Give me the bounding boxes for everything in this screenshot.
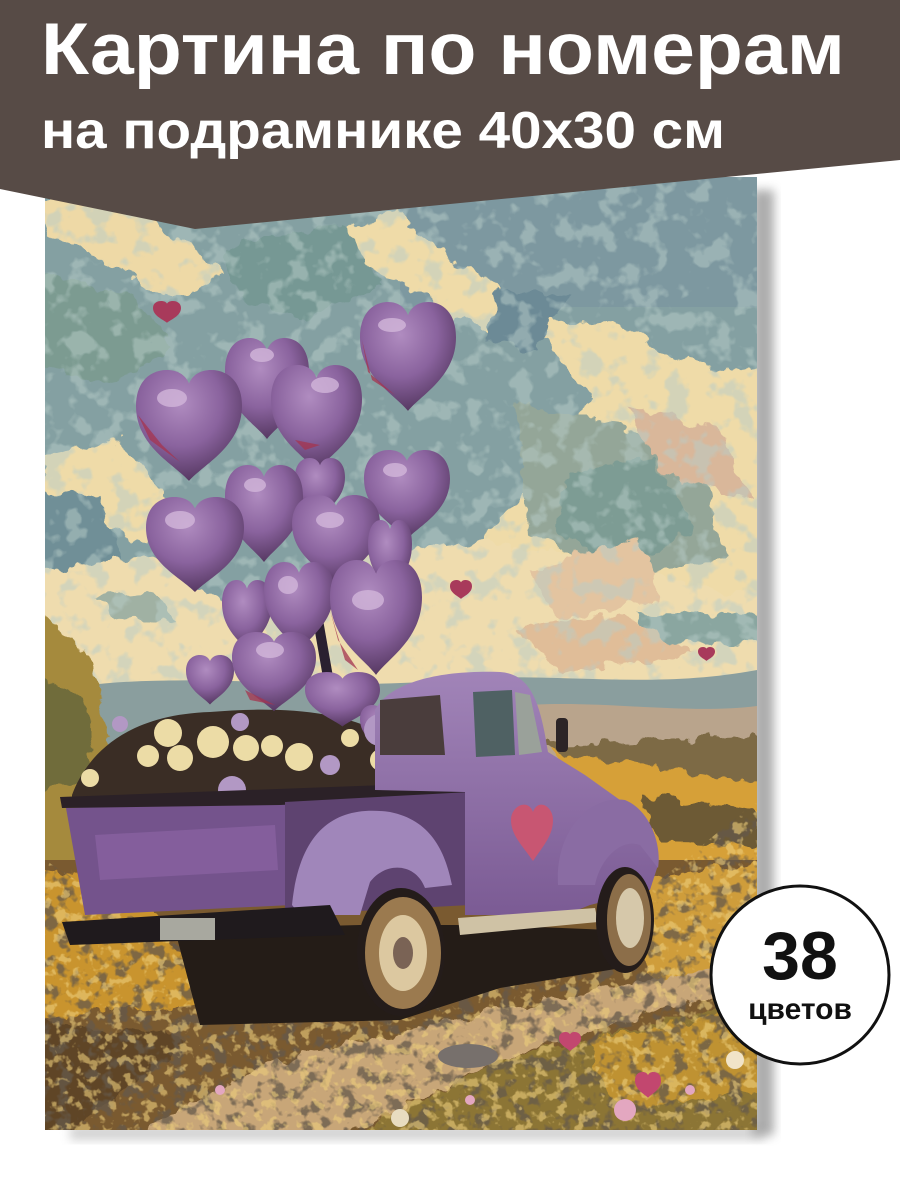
sky — [45, 198, 757, 602]
clouds — [38, 200, 770, 710]
string shadow behind balloons — [315, 623, 332, 672]
balloons — [136, 302, 456, 750]
fields — [45, 615, 757, 860]
side mirror — [556, 718, 568, 752]
front wheel — [596, 867, 654, 973]
specks of flowers — [215, 1051, 744, 1127]
truck bed — [66, 800, 292, 915]
sky mottling — [45, 177, 757, 657]
front fender — [558, 800, 659, 885]
subheading: на подрамнике 40х30 см — [41, 102, 725, 160]
spilled flowers over bed — [218, 715, 375, 792]
rear wheel — [361, 888, 441, 1009]
running board and bumper — [458, 908, 598, 935]
distant hills — [99, 670, 757, 744]
heart on door — [511, 805, 553, 861]
cab — [375, 672, 658, 915]
small floating hearts — [153, 301, 715, 1098]
label: цветов — [748, 993, 852, 1026]
truck — [60, 672, 659, 1025]
colour count badge — [711, 886, 889, 1064]
underbody shadow — [175, 925, 640, 1025]
ground mottling — [45, 800, 757, 1130]
painting: truck with heart balloons — [38, 177, 770, 1140]
heading: Картина по номерам — [41, 9, 845, 90]
canvas shadow — [70, 190, 774, 1140]
foreground ground — [45, 860, 757, 1130]
balloon highlights — [157, 318, 407, 658]
flower load — [72, 710, 375, 797]
rear side panel — [285, 792, 470, 915]
number: 38 — [762, 918, 838, 994]
title banner — [0, 0, 900, 229]
